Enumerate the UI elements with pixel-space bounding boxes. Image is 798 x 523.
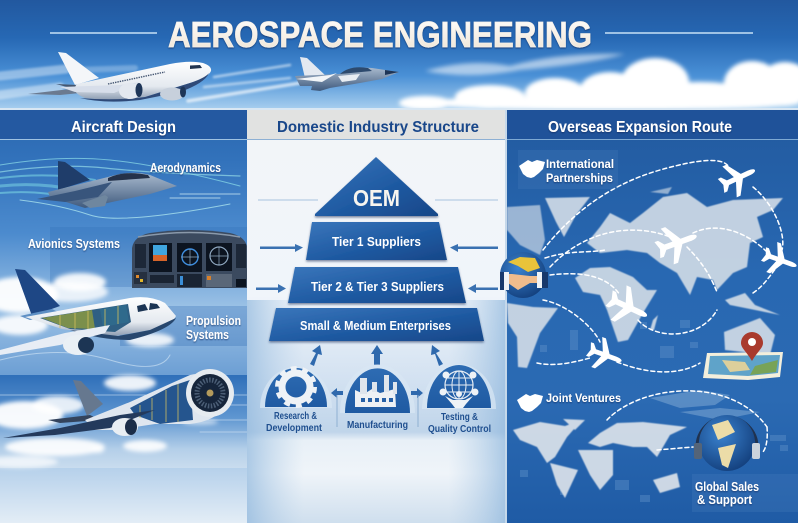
item: research and development: Research & bbox=[274, 410, 317, 422]
tier: small and medium enterprises: Small & Medium Enterprises bbox=[300, 319, 451, 333]
label: international partnerships bbox=[518, 150, 618, 189]
tier: OEM: OEM bbox=[353, 185, 400, 211]
icon: airliner cutaway bbox=[0, 269, 176, 355]
label: propulsion systems: Propulsion bbox=[186, 314, 241, 328]
item: testing and quality control bbox=[422, 364, 496, 435]
icon: map with location pin bbox=[703, 332, 783, 380]
label: aerodynamics: Aerodynamics bbox=[150, 161, 221, 175]
route lines: upper bbox=[537, 160, 783, 372]
icon: handshake bbox=[519, 160, 545, 178]
item: manufacturing bbox=[340, 364, 415, 431]
label: global sales and support: Global Sales bbox=[695, 480, 759, 494]
arrows between items bbox=[331, 388, 423, 427]
label: joint ventures: Joint Ventures bbox=[546, 391, 621, 405]
item: research and development bbox=[260, 367, 332, 434]
tier: tier 2 and tier 3 suppliers: Tier 2 & Tier 3 Suppliers bbox=[311, 279, 444, 294]
upper band of faded land bbox=[650, 390, 760, 420]
item: manufacturing: Manufacturing bbox=[347, 419, 408, 431]
contrails bbox=[0, 65, 300, 101]
panel header: overseas expansion route bbox=[507, 110, 798, 140]
label: joint ventures bbox=[517, 391, 621, 412]
panel: overseas expansion route bbox=[500, 110, 798, 523]
icon: fighter jet in header bbox=[295, 57, 399, 91]
route lines: lower bbox=[607, 391, 767, 452]
tier: tier 1 suppliers: Tier 1 Suppliers bbox=[332, 234, 421, 249]
panel: aircraft design bbox=[0, 110, 247, 523]
icon: handshake bbox=[517, 394, 543, 412]
tier: tier 1 suppliers bbox=[306, 222, 447, 260]
icon: avionics cockpit display bbox=[132, 230, 247, 288]
title: AEROSPACE ENGINEERING bbox=[168, 14, 592, 55]
icon: globe with headset bbox=[694, 415, 760, 471]
icon: fighter jet bbox=[37, 161, 177, 208]
divider under header bbox=[0, 108, 798, 110]
side lines and arrows bbox=[256, 200, 498, 293]
panel header: overseas expansion route: Overseas Expansion Route bbox=[548, 119, 732, 136]
label: international partnerships: International bbox=[546, 157, 614, 171]
label: avionics systems: Avionics Systems bbox=[28, 237, 120, 251]
tier: OEM bbox=[315, 157, 438, 216]
panel: domestic industry structure bbox=[247, 110, 505, 523]
item: testing and quality control: Testing & bbox=[441, 411, 478, 423]
icon: airliner with oversized turbofan bbox=[3, 369, 234, 438]
tier: tier 2 and tier 3 suppliers bbox=[288, 267, 466, 303]
label: global sales and support: & Support bbox=[697, 493, 753, 507]
airflow lines bbox=[0, 158, 247, 432]
tier: small and medium enterprises bbox=[269, 308, 484, 341]
pixel squares decoration bbox=[520, 320, 788, 502]
label: international partnerships: Partnerships bbox=[546, 171, 613, 185]
item: testing and quality control: Quality Control bbox=[428, 423, 491, 435]
panel header: aircraft design: Aircraft Design bbox=[71, 119, 176, 136]
arrows up to pyramid bbox=[310, 345, 443, 366]
world map: lower bbox=[513, 419, 687, 498]
planes on routes bbox=[583, 155, 798, 376]
panel header: domestic industry structure bbox=[247, 110, 505, 140]
label: global sales and support bbox=[692, 474, 798, 512]
header clouds bbox=[399, 54, 798, 110]
icon: globe with handshake bbox=[500, 252, 548, 298]
icon: airliner in header bbox=[28, 52, 211, 102]
clouds and band backgrounds bbox=[0, 227, 247, 468]
pyramid bbox=[269, 157, 484, 341]
panel header: aircraft design bbox=[0, 110, 247, 140]
label: propulsion systems: Systems bbox=[186, 328, 229, 342]
panel header: domestic industry structure: Domestic Industry Structure bbox=[277, 119, 479, 136]
world map: upper bbox=[507, 187, 783, 368]
header banner bbox=[0, 0, 798, 110]
item: research and development: Development bbox=[266, 422, 322, 434]
label: propulsion systems bbox=[186, 314, 241, 342]
